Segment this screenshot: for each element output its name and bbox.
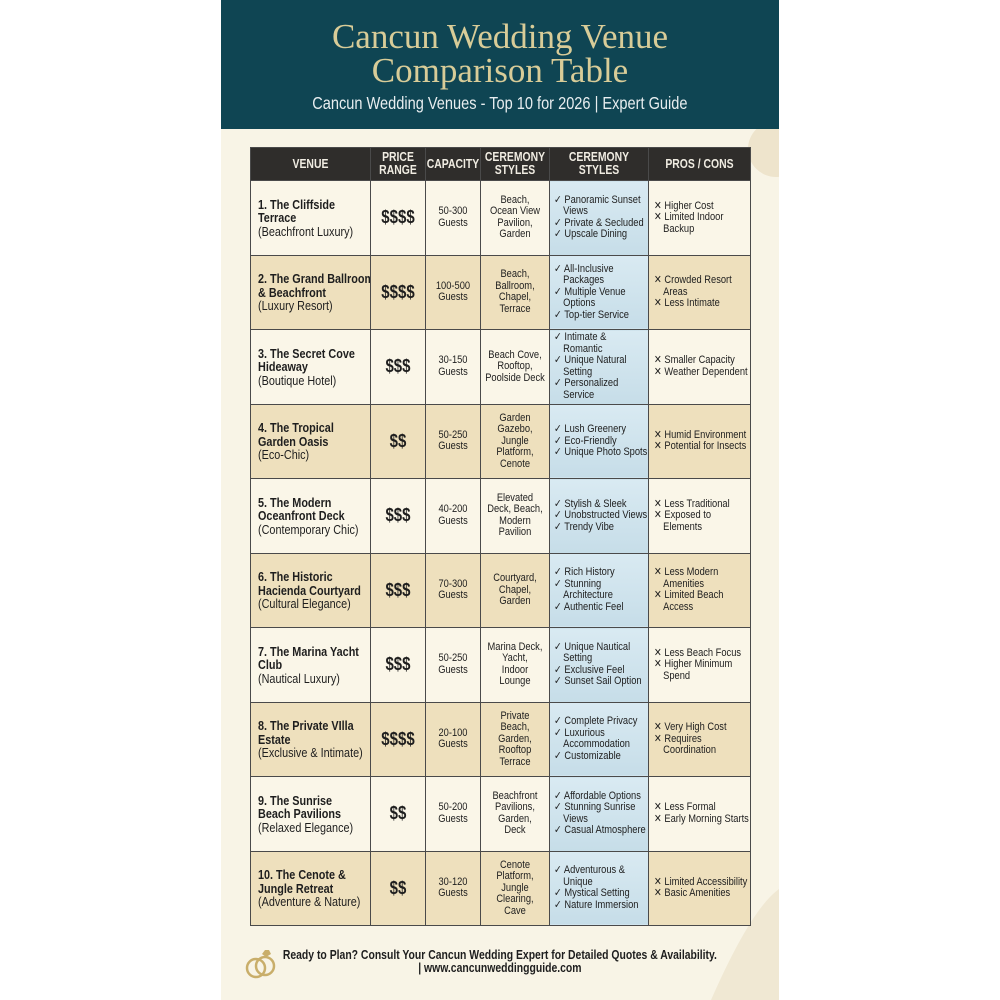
row 2: ✓ All-Inclusive Packages (554, 262, 614, 286)
row 3: Hideaway (258, 359, 308, 374)
row 3: ✕ Smaller Capacity (654, 354, 735, 366)
row 5 (258, 479, 730, 553)
row 6: Courtyard, (493, 572, 537, 584)
row 7: Club (258, 657, 282, 672)
row 5: ✕ Less Traditional (654, 498, 730, 510)
row 2: & Beachfront (258, 284, 326, 300)
row 6: Hacienda Courtyard (258, 582, 361, 598)
row 5: 40-200 (438, 503, 467, 515)
row 4: $$ (390, 430, 406, 450)
row 2: 100-500 (436, 280, 470, 292)
icon: wedding rings (246, 950, 276, 978)
row 6: $$$ (385, 580, 411, 600)
row 10: 30-120 (438, 876, 467, 888)
row 8: Rooftop (499, 744, 531, 756)
row 3 (258, 330, 748, 404)
row 7: (Nautical Luxury) (258, 670, 340, 686)
row 4: ✓ Lush Greenery (554, 423, 626, 435)
row 5: Elevated (497, 492, 533, 504)
row 7: ✓ Sunset Sail Option (554, 675, 642, 687)
row 9: Garden, (498, 813, 532, 825)
row 9: Deck (504, 824, 526, 836)
table header row: PRICE (382, 150, 414, 164)
row 8: (Exclusive & Intimate) (258, 745, 363, 760)
row 9: ✓ Affordable Options (554, 790, 641, 802)
row 9: (Relaxed Elegance) (258, 820, 353, 834)
row 6: Guests (438, 589, 468, 601)
row 4: Garden (499, 412, 531, 424)
row 10: ✓ Mystical Setting (554, 887, 630, 899)
row 5: 5. The Modern (258, 494, 331, 510)
title: Cancun Wedding Venue (332, 17, 668, 56)
row 7: Guests (438, 664, 468, 676)
row 1: ✕ Limited Indoor Backup (654, 211, 723, 234)
row 1: ✕ Higher Cost (654, 200, 714, 212)
infographic card (221, 0, 779, 1000)
table header row: VENUE (293, 156, 328, 170)
table header row: CAPACITY (427, 156, 479, 170)
row 5: Modern (499, 515, 531, 527)
row 2: ✕ Less Intimate (654, 297, 720, 309)
row 1: ✓ Private & Secluded (554, 217, 644, 229)
row 10: 10. The Cenote & (258, 867, 346, 882)
row 10: Guests (438, 887, 468, 899)
row 3: ✓ Unique Natural Setting (554, 354, 627, 378)
row 8: ✕ Very High Cost (654, 721, 727, 733)
row 5: Deck, Beach, (487, 503, 543, 515)
row 7: Lounge (499, 675, 531, 687)
row 1: Terrace (258, 210, 296, 225)
row 5: ✓ Unobstructed Views (554, 509, 647, 521)
row 4: ✓ Eco-Friendly (554, 434, 617, 446)
row 2: Chapel, (499, 291, 531, 303)
table header row (251, 148, 750, 925)
row 1: 1. The Cliffside (258, 196, 335, 212)
row 3: 3. The Secret Cove (258, 346, 355, 360)
row 9: 9. The Sunrise (258, 792, 332, 808)
row 10: ✕ Basic Amenities (654, 887, 730, 899)
row 3: ✕ Weather Dependent (654, 366, 748, 378)
row 5: ✓ Trendy Vibe (554, 520, 614, 532)
row 10 (251, 852, 750, 925)
row 6 (251, 554, 750, 627)
row 7: ✕ Higher Minimum Spend (654, 658, 732, 682)
table header row: CEREMONY (569, 150, 629, 164)
row 5: (Contemporary Chic) (258, 522, 359, 536)
row 8: ✕ Requires Coordination (654, 732, 716, 756)
row 5: Guests (438, 515, 468, 527)
row 4: ✓ Unique Photo Spots (554, 446, 647, 458)
row 4: Cenote (500, 458, 530, 470)
row 1: 50-300 (438, 205, 467, 217)
row 7: ✓ Unique Nautical Setting (554, 641, 630, 664)
row 8: Guests (438, 738, 468, 750)
footer call to action (283, 948, 717, 975)
row 3: Guests (438, 366, 468, 378)
row 4: 50-250 (438, 429, 467, 441)
row 9: Beachfront (492, 790, 538, 802)
row 2: Ballroom, (495, 280, 535, 292)
row 1: $$$$ (381, 207, 415, 227)
row 6: ✓ Stunning Architecture (554, 578, 613, 601)
row 4: Jungle (501, 434, 529, 446)
row 3: Beach Cove, (488, 348, 542, 360)
row 2: ✓ Top-tier Service (554, 308, 629, 320)
header band (221, 0, 779, 129)
row 1: (Beachfront Luxury) (258, 224, 353, 238)
row 10: Cenote (500, 858, 530, 870)
title: Comparison Table (372, 51, 628, 90)
row 3: ✓ Intimate & Romantic (554, 331, 606, 355)
row 10: (Adventure & Nature) (258, 894, 360, 909)
row 9: ✓ Casual Atmosphere (554, 824, 646, 836)
table header row: CEREMONY (485, 150, 545, 164)
row 10: Clearing, (496, 893, 534, 905)
row 5: ✕ Exposed to Elements (654, 509, 711, 532)
row 9: ✕ Less Formal (654, 801, 716, 813)
row 8: ✓ Customizable (554, 750, 621, 762)
row 6: 70-300 (438, 578, 467, 590)
row 10: ✓ Nature Immersion (554, 899, 638, 911)
row 4: Guests (438, 440, 468, 452)
row 6: ✓ Rich History (554, 566, 615, 578)
row 8: Garden, (498, 732, 532, 744)
row 9: $$ (390, 803, 406, 823)
row 7: 50-250 (438, 652, 467, 664)
row 8: Estate (258, 732, 291, 746)
row 2: $$$$ (381, 282, 415, 302)
row 8: ✓ Complete Privacy (554, 715, 637, 727)
row 1: Guests (438, 217, 468, 229)
row 3: Rooftop, (497, 360, 533, 372)
background decorations (711, 129, 779, 1000)
row 9: Pavilions, (495, 801, 535, 813)
row 4: ✕ Potential for Insects (654, 440, 746, 452)
row 7: Yacht, (502, 652, 528, 664)
row 8: Beach, (500, 721, 529, 733)
row 10: Platform, (496, 870, 534, 882)
row 7: $$$ (385, 654, 411, 674)
row 9: 50-200 (438, 801, 467, 813)
row 10: $$ (390, 878, 406, 898)
row 6: ✕ Less Modern Amenities (654, 566, 718, 590)
row 8: 8. The Private VIlla (258, 718, 354, 733)
row 8: Terrace (499, 756, 531, 768)
row 10: Jungle (501, 882, 529, 894)
row 7 (258, 628, 741, 702)
row 3: Poolside Deck (485, 372, 545, 384)
row 9: ✕ Early Morning Starts (654, 813, 749, 825)
row 4: (Eco-Chic) (258, 447, 309, 462)
row 9 (258, 777, 749, 851)
row 2: Beach, (500, 268, 529, 280)
row 4 (251, 405, 750, 478)
row 5: Oceanfront Deck (258, 508, 345, 523)
footer call to action: | www.cancunweddingguide.com (418, 961, 582, 975)
row 1 (258, 181, 724, 255)
comparison table (250, 147, 751, 926)
row 3: $$$ (385, 356, 411, 376)
row 5: Pavilion (499, 526, 531, 538)
row 9: Beach Pavilions (258, 806, 341, 821)
row 10: Jungle Retreat (258, 880, 333, 896)
row 8 (251, 703, 750, 776)
row 4: Garden Oasis (258, 434, 328, 448)
row 6: (Cultural Elegance) (258, 596, 351, 611)
row 1: Ocean View Pavilion, (490, 205, 540, 229)
table header row: RANGE (379, 163, 417, 177)
row 6: Garden (499, 595, 531, 607)
row 10: ✓ Adventurous & Unique (554, 864, 625, 888)
row 10: Cave (504, 904, 526, 916)
row 3: (Boutique Hotel) (258, 372, 336, 388)
row 7: Indoor (502, 664, 528, 676)
row 7: Marina Deck, (488, 641, 542, 653)
row 3: 30-150 (438, 354, 467, 366)
row 9: Guests (438, 813, 468, 825)
row 1: Garden (499, 228, 531, 240)
table header row: STYLES (495, 163, 535, 177)
row 5: ✓ Stylish & Sleek (554, 498, 627, 510)
row 8: $$$$ (381, 728, 415, 748)
row 1: ✓ Panoramic Sunset Views (554, 194, 641, 217)
table header row: PROS / CONS (665, 156, 734, 170)
row 1: Beach, (500, 194, 529, 206)
row 2: (Luxury Resort) (258, 298, 333, 313)
row 8: 20-100 (438, 727, 467, 739)
title (332, 17, 668, 90)
row 2: Terrace (499, 303, 531, 315)
row 6: ✓ Authentic Feel (554, 601, 623, 613)
table header row: STYLES (579, 163, 619, 177)
row 6: 6. The Historic (258, 569, 333, 584)
row 4: 4. The Tropical (258, 420, 334, 435)
row 2: ✓ Multiple Venue Options (554, 286, 626, 309)
row 5: $$$ (385, 505, 411, 525)
row 2: ✕ Crowded Resort Areas (654, 274, 732, 298)
row 2 (251, 256, 750, 329)
subtitle: Cancun Wedding Venues - Top 10 for 2026 | Expert Guide (312, 93, 687, 113)
row 6: Chapel, (499, 584, 531, 596)
row 3: ✓ Personalized Service (554, 377, 618, 401)
row 6: ✕ Limited Beach Access (654, 589, 723, 613)
row 7: 7. The Marina Yacht (258, 644, 359, 658)
row 4: Platform, (496, 446, 534, 458)
row 9: ✓ Stunning Sunrise Views (554, 801, 635, 825)
row 4: ✕ Humid Environment (654, 429, 746, 441)
row 4: Gazebo, (497, 423, 533, 435)
row 8: Private (500, 710, 529, 722)
row 2: Guests (438, 291, 468, 303)
row 7: ✓ Exclusive Feel (554, 664, 624, 676)
row 8: ✓ Luxurious Accommodation (554, 727, 630, 750)
row 7: ✕ Less Beach Focus (654, 646, 741, 658)
row 1: ✓ Upscale Dining (554, 228, 627, 240)
footer call to action: Ready to Plan? Consult Your Cancun Wedding Expert for Detailed Quotes & Availability. (283, 948, 717, 962)
row 10: ✕ Limited Accessibility (654, 876, 747, 888)
